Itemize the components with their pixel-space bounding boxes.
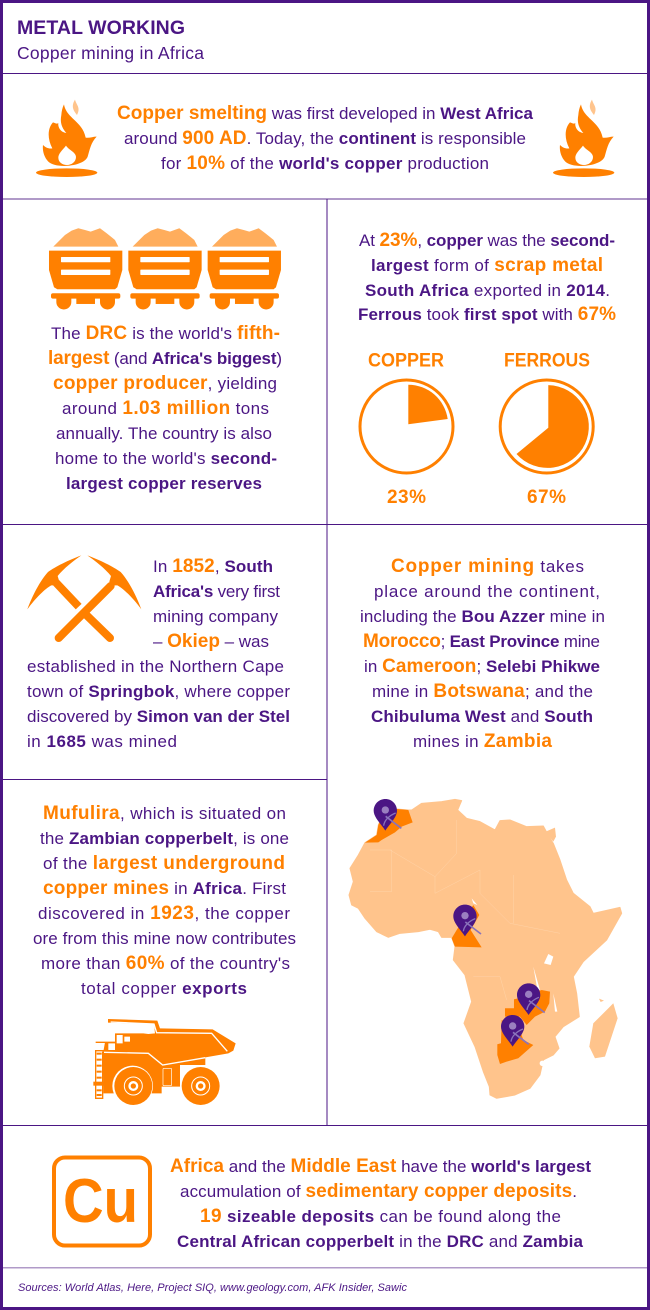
title: METAL WORKING [17, 17, 185, 39]
scrap metal text: At 23%, copper was the second- [359, 230, 615, 251]
Okiep text: In 1852, South [153, 556, 273, 577]
DRC text [48, 323, 282, 493]
Okiep text: established in the Northern Cape [27, 657, 284, 676]
map of Africa [349, 799, 622, 1098]
mines text: place around the continent, [374, 582, 600, 601]
title [17, 17, 204, 63]
deposits text [170, 1156, 591, 1251]
pie chart: copper [360, 350, 453, 508]
panel: DRC [48, 228, 282, 493]
intro text: Copper smelting was first developed in West Africa [117, 103, 534, 124]
panel: Okiep [27, 555, 290, 751]
Okiep text [27, 556, 290, 751]
mines text: including the Bou Azzer mine in [360, 607, 605, 626]
DRC text: around 1.03 million tons [62, 398, 269, 419]
intro text: for 10% of the world's copper production [161, 153, 489, 174]
mines text: Copper mining takes [391, 556, 584, 577]
Mufulira text: of the largest underground [43, 853, 285, 874]
Mufulira text: discovered in 1923, the copper [38, 903, 290, 924]
Mufulira text: copper mines in Africa. First [43, 878, 286, 899]
scrap metal text [358, 230, 616, 325]
Okiep text: town of Springbok, where copper [27, 682, 290, 701]
DRC text: home to the world's second- [55, 449, 277, 468]
DRC text: copper producer, yielding [53, 373, 277, 394]
Mufulira text: ore from this mine now contributes [33, 929, 296, 948]
sources: Sources: World Atlas, Here, Project SIQ, www.geology.com, AFK Insider, Sawic [18, 1282, 408, 1294]
mines text: Chibuluma West and South [371, 707, 593, 726]
panel: mines map [349, 556, 622, 1098]
deposits text: accumulation of sedimentary copper deposits. [180, 1181, 577, 1202]
DRC text: largest (and Africa's biggest) [48, 348, 282, 369]
pin: Botswana [501, 1015, 529, 1047]
mines text: Morocco; East Province mine [363, 631, 600, 652]
mines text: mines in Zambia [413, 731, 552, 752]
mines text: in Cameroon; Selebi Phikwe [364, 656, 600, 677]
icon: right flame [553, 100, 614, 177]
Okiep text: Africa's very first [153, 582, 280, 601]
deposits text: 19 sizeable deposits can be found along the [200, 1206, 561, 1227]
DRC text: largest copper reserves [66, 474, 262, 493]
panel: intro [36, 100, 614, 177]
icon: dump truck [93, 1019, 236, 1106]
pin: Cameroon [453, 905, 481, 936]
pie chart: ferrous: 67% [527, 487, 566, 508]
scrap metal text: South Africa exported in 2014. [365, 281, 610, 300]
deposits text: Central African copperbelt in the DRC and Zambia [177, 1232, 584, 1251]
title: Copper mining in Africa [17, 43, 204, 63]
Okiep text: mining company [153, 607, 278, 626]
pin: Zambia [517, 983, 545, 1015]
Mufulira text: more than 60% of the country's [41, 953, 290, 974]
mines text: mine in Botswana; and the [372, 681, 593, 702]
Mufulira text: the Zambian copperbelt, is one [40, 829, 289, 848]
scrap metal text: Ferrous took first spot with 67% [358, 304, 616, 325]
pin: Morocco [374, 799, 401, 831]
panel: deposits [54, 1156, 591, 1251]
Mufulira text: Mufulira, which is situated on [43, 803, 286, 824]
icon: Cu element box: Cu [63, 1167, 138, 1236]
icon: left flame [36, 100, 97, 177]
pie chart: copper: COPPER [368, 350, 444, 372]
deposits text: Africa and the Middle East have the world's largest [170, 1156, 591, 1177]
Mufulira text: total copper exports [81, 979, 247, 998]
panel: Mufulira [33, 803, 296, 1106]
Mufulira text [33, 803, 296, 998]
DRC text: annually. The country is also [56, 424, 272, 443]
Okiep text: discovered by Simon van der Stel [27, 707, 290, 726]
intro text [117, 103, 534, 174]
Okiep text: – Okiep – was [153, 631, 269, 652]
icon: Cu element box [54, 1158, 150, 1246]
DRC text: The DRC is the world's fifth- [51, 323, 280, 344]
icon: crossed pickaxes [27, 555, 141, 638]
panel: scrap metal [358, 230, 616, 508]
mines text [360, 556, 605, 752]
pie chart: ferrous: FERROUS [504, 350, 590, 372]
Okiep text: in 1685 was mined [27, 732, 177, 751]
icon: mine carts [49, 228, 281, 309]
pie chart: copper: 23% [387, 487, 426, 508]
pie chart: ferrous [500, 350, 593, 508]
intro text: around 900 AD. Today, the continent is responsible [124, 128, 526, 149]
scrap metal text: largest form of scrap metal [371, 255, 603, 276]
